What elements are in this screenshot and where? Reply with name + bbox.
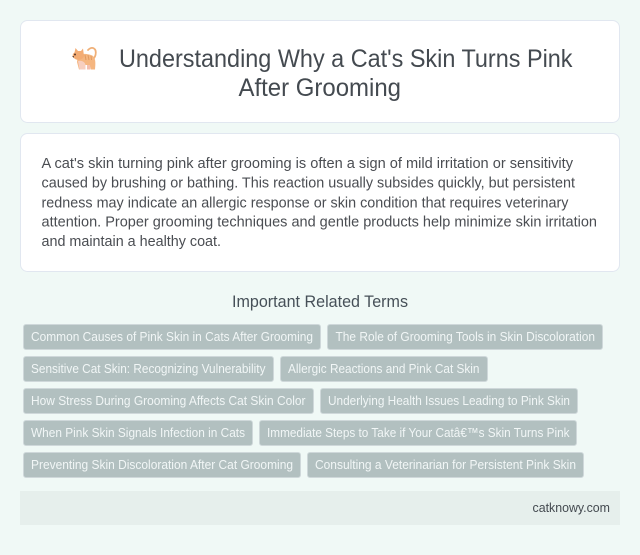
text block: description: and maintain a healthy coat. [42, 233, 221, 250]
heading: important related terms: Important Related Terms [232, 293, 408, 311]
title [119, 45, 573, 102]
title: After Grooming [238, 74, 401, 102]
tag: grooming tools [328, 324, 602, 350]
footer bar [20, 491, 620, 525]
tag: infection [24, 420, 252, 446]
tag: immediate steps: Immediate Steps to Take if Your Catâ€™s Skin Turns Pink [267, 425, 570, 440]
footer text: site name: catknowy.com [532, 500, 610, 515]
panel: description card [20, 134, 620, 272]
panel: header card [20, 20, 620, 122]
tag: sensitive skin: Sensitive Cat Skin: Recognizing Vulnerability [31, 361, 266, 376]
tag: stress: How Stress During Grooming Affects Cat Skin Color [31, 393, 306, 408]
tag: stress [24, 388, 314, 414]
tag: preventing discoloration [24, 452, 300, 478]
tag: common causes: Common Causes of Pink Skin in Cats After Grooming [31, 329, 313, 344]
text block: description: A cat's skin turning pink after grooming is often a sign of mild irritation or sensitivity [42, 155, 573, 172]
tag: grooming tools: The Role of Grooming Tools in Skin Discoloration [336, 329, 595, 344]
tag: immediate steps [260, 420, 576, 446]
tag: preventing discoloration: Preventing Skin Discoloration After Cat Grooming [31, 457, 293, 472]
tag list [24, 324, 602, 478]
text block: description [42, 155, 597, 250]
tag: health issues: Underlying Health Issues Leading to Pink Skin [328, 393, 570, 408]
tag: consulting a veterinarian: Consulting a Veterinarian for Persistent Pink Skin [315, 457, 576, 472]
text block: description: caused by brushing or bathing. This reaction usually subsides quickly, but persistent [42, 174, 576, 192]
tag: common causes [24, 324, 320, 350]
icon: orange cat [72, 48, 96, 70]
tag: consulting a veterinarian [308, 452, 584, 478]
text block: description: attention. Proper grooming techniques and gentle products help minimize skin irritation [42, 214, 597, 230]
tag: allergic reactions [280, 356, 488, 382]
tag: sensitive skin [24, 356, 274, 382]
tag: infection: When Pink Skin Signals Infection in Cats [31, 425, 245, 440]
text block: description: redness may indicate an allergic response or skin condition that requires veterinary [42, 194, 569, 212]
tag: allergic reactions: Allergic Reactions and Pink Cat Skin [288, 361, 480, 376]
title: Understanding Why a Cat's Skin Turns Pink [119, 45, 573, 73]
tag: health issues [320, 388, 578, 414]
